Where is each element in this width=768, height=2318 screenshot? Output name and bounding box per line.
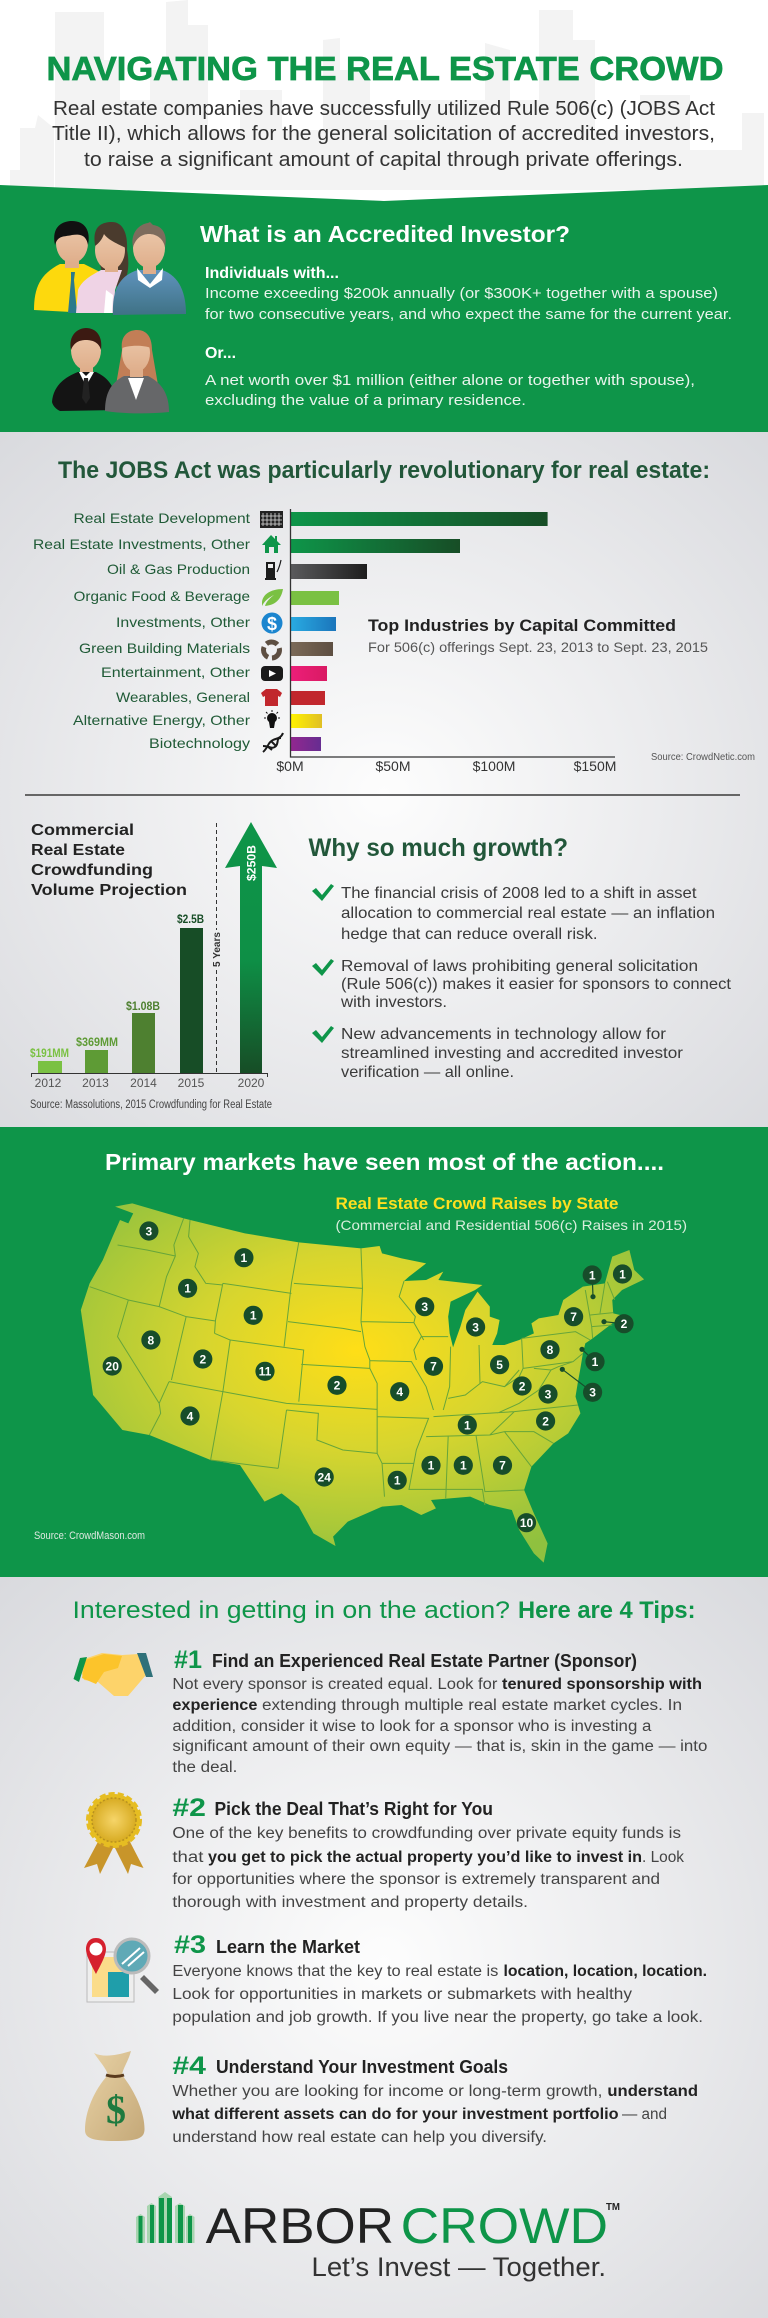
text block: or xyxy=(205,345,695,409)
tip 2: you get to pick the actual property you’d like to invest in xyxy=(208,1849,642,1866)
map: united states xyxy=(81,1203,644,1563)
source: Source: Massolutions, 2015 Crowdfunding for Real Estate xyxy=(30,1099,272,1111)
heading: projection chart: Real Estate xyxy=(31,842,125,859)
icon: leaf xyxy=(262,589,283,606)
icon: logo buildings xyxy=(136,2192,194,2243)
heading: The JOBS Act was particularly revolutionary for real estate: xyxy=(58,457,710,484)
logo: TM xyxy=(606,2202,620,2213)
map title: (Commercial and Residential 506(c) Raises in 2015) xyxy=(336,1217,687,1233)
bar chart: top industries: Investments, Other xyxy=(116,614,250,630)
state count badges: 1 xyxy=(250,1309,257,1323)
bar chart: volume projection: $369MM xyxy=(76,1037,118,1049)
text block: or: Or... xyxy=(205,345,236,362)
tip 1: addition, consider it wise to look for a sponsor who is investing a xyxy=(172,1718,652,1735)
bar chart: volume projection: 2015 xyxy=(178,1076,205,1090)
intro text: Title II), which allows for the general solicitation of accredited investors, xyxy=(52,123,715,145)
heading xyxy=(72,1597,696,1624)
state count badges: 3 xyxy=(421,1300,428,1314)
icon: fuel pump xyxy=(265,560,281,580)
tip 2: One of the key benefits to crowdfunding over private equity funds is xyxy=(172,1825,681,1842)
tip 2: thorough with investment and property details. xyxy=(172,1894,528,1911)
check item 2 xyxy=(312,958,732,1011)
state count badges: 11 xyxy=(259,1365,272,1379)
panel: primary markets map xyxy=(0,1127,768,1577)
heading: why so much growth: Why so much growth? xyxy=(308,834,568,862)
state count badges: 1 xyxy=(460,1459,467,1473)
icon: money bag xyxy=(85,2051,145,2141)
bar chart: top industries: $100M xyxy=(473,758,515,774)
state count badges xyxy=(103,1221,634,1532)
panel: tips xyxy=(0,1577,768,2318)
bar chart: top industries: Green Building Materials xyxy=(79,640,250,656)
bar chart: volume projection: $191MM xyxy=(30,1048,69,1060)
intro text: Real estate companies have successfully utilized Rule 506(c) (JOBS Act xyxy=(53,98,715,120)
bar chart: volume projection: 2014 xyxy=(130,1076,157,1090)
text block: or: A net worth over $1 million (either alone or together with spouse), xyxy=(205,372,695,389)
icon: video play xyxy=(261,666,283,681)
icon: money bag: $ xyxy=(106,2087,126,2132)
bar chart: top industries: $50M xyxy=(375,758,411,774)
map title: Real Estate Crowd Raises by State xyxy=(336,1195,618,1213)
tip 2: #2 xyxy=(172,1794,206,1822)
state count badges: 3 xyxy=(472,1320,479,1334)
icon: three investors xyxy=(34,221,186,315)
logo: ARBOR xyxy=(206,2198,394,2254)
heading: Interested in getting in on the action? xyxy=(72,1597,510,1624)
check item 1: allocation to commercial real estate — an inflation xyxy=(341,905,715,922)
state count badges: 1 xyxy=(394,1474,401,1488)
bar chart: volume projection xyxy=(30,822,277,1090)
logo: CROWD xyxy=(401,2198,608,2254)
tip 2: . Look xyxy=(642,1849,684,1866)
chart caption: Top Industries by Capital Committed xyxy=(368,617,676,635)
check item 1: The financial crisis of 2008 led to a shift in asset xyxy=(341,885,697,902)
check item 2: with investors. xyxy=(340,994,447,1011)
heading: projection chart: Commercial xyxy=(31,822,134,839)
heading: What is an Accredited Investor? xyxy=(200,221,570,247)
icon: house xyxy=(262,535,281,553)
tip 4: Whether you are looking for income or long-term growth, xyxy=(172,2083,602,2100)
tip 2: Pick the Deal That’s Right for You xyxy=(214,1799,493,1819)
tip 4: — and xyxy=(622,2106,667,2123)
bar chart: top industries: Real Estate Investments, Other xyxy=(33,536,250,552)
logo xyxy=(136,2192,620,2282)
bar chart: volume projection: $250B xyxy=(244,845,258,881)
state count badges: 1 xyxy=(619,1267,626,1281)
tip 4: what different assets can do for your investment portfolio xyxy=(171,2106,619,2123)
intro text: to raise a significant amount of capital through private offerings. xyxy=(84,149,683,171)
bar chart: volume projection: 2020 xyxy=(238,1076,265,1090)
tip 1: #1 xyxy=(174,1646,202,1674)
tip 2: that xyxy=(172,1849,204,1866)
text block: individuals: Income exceeding $200k annually (or $300K+ together with a spouse) xyxy=(205,285,718,302)
state count badges: 3 xyxy=(589,1386,596,1400)
bar chart: top industries: Biotechnology xyxy=(149,735,250,751)
state count badges: 5 xyxy=(496,1358,503,1372)
state count badges: 2 xyxy=(334,1379,341,1393)
state count badges: 24 xyxy=(318,1470,331,1484)
icon: dollar coin: $ xyxy=(267,614,277,634)
chart caption: For 506(c) offerings Sept. 23, 2013 to Sept. 23, 2015 xyxy=(368,639,708,655)
tip 3: #3 xyxy=(174,1931,206,1959)
tip 4: Understand Your Investment Goals xyxy=(216,2057,508,2077)
title: NAVIGATING THE REAL ESTATE CROWD xyxy=(46,50,724,87)
bar chart: volume projection: $1.08B xyxy=(126,1001,160,1013)
bar chart: volume projection: 2012 xyxy=(35,1076,62,1090)
bar chart: top industries: Real Estate Development xyxy=(74,510,250,526)
bar chart: top industries: Wearables, General xyxy=(116,689,250,705)
tip 3: Look for opportunities in markets or submarkets with healthy xyxy=(172,1986,632,2003)
check item 2: Removal of laws prohibiting general solicitation xyxy=(341,958,698,975)
tip 3: population and job growth. If you live near the property, go take a look. xyxy=(172,2009,703,2026)
bar chart: top industries xyxy=(33,509,616,774)
state count badges: 1 xyxy=(184,1282,191,1296)
check list xyxy=(312,884,732,1081)
map title xyxy=(336,1195,687,1233)
tip 1: tenured sponsorship with xyxy=(502,1676,702,1693)
tip 1: Not every sponsor is created equal. Look for xyxy=(172,1676,497,1693)
icon: map and magnifier xyxy=(86,1938,159,2002)
tip 4: understand how real estate can help you diversify. xyxy=(172,2129,547,2146)
map connectors xyxy=(560,1275,624,1392)
check item 3 xyxy=(312,1026,684,1081)
intro text xyxy=(52,98,715,171)
state count badges: 20 xyxy=(106,1359,119,1373)
chart caption xyxy=(368,617,708,655)
tip 2: for opportunities where the sponsor is extremely transparent and xyxy=(172,1871,660,1888)
state count badges: 8 xyxy=(148,1333,155,1347)
state count badges: 1 xyxy=(464,1418,471,1432)
tip 4 xyxy=(85,2051,698,2146)
icon: dollar coin xyxy=(262,612,282,634)
tip 1: significant amount of their own equity — that is, skin in the game — into xyxy=(172,1738,707,1755)
tip 3: Everyone knows that the key to real estate is xyxy=(172,1963,499,1980)
state count badges: 2 xyxy=(542,1414,549,1428)
icon: building xyxy=(260,511,283,528)
state count badges: 1 xyxy=(428,1459,435,1473)
state count badges: 7 xyxy=(430,1360,437,1374)
source: Source: CrowdNetic.com xyxy=(651,752,755,763)
heading: projection chart: Volume Projection xyxy=(31,882,187,899)
state count badges: 1 xyxy=(589,1268,596,1282)
state count badges: 7 xyxy=(570,1310,577,1324)
text block: individuals: for two consecutive years, and who expect the same for the current year. xyxy=(205,306,732,323)
state count badges: 2 xyxy=(519,1379,526,1393)
icon: handshake xyxy=(74,1653,153,1696)
icon: two investors xyxy=(52,328,169,413)
heading: projection chart xyxy=(31,822,187,899)
tip 1 xyxy=(74,1646,707,1776)
icon: dna xyxy=(263,733,283,752)
heading: Primary markets have seen most of the action.... xyxy=(105,1149,664,1175)
state count badges: 10 xyxy=(520,1516,533,1530)
state count badges: 2 xyxy=(621,1317,628,1331)
bar chart: top industries: Alternative Energy, Other xyxy=(73,712,250,728)
state count badges: 2 xyxy=(199,1352,206,1366)
check item 3: verification — all online. xyxy=(341,1064,514,1081)
bar chart: top industries: Oil & Gas Production xyxy=(107,561,250,577)
state count badges: 8 xyxy=(547,1343,554,1357)
check item 3: streamlined investing and accredited investor xyxy=(341,1045,684,1062)
tip 4: understand xyxy=(607,2083,698,2100)
bar chart: top industries: Organic Food & Beverage xyxy=(74,588,250,604)
panel: accredited investor xyxy=(0,185,768,432)
tip 1: experience xyxy=(172,1697,258,1714)
heading: projection chart: Crowdfunding xyxy=(31,862,153,879)
bar chart: top industries: $0M xyxy=(276,758,304,774)
state count badges: 1 xyxy=(592,1355,599,1369)
tip 2 xyxy=(84,1794,684,1911)
bar chart: volume projection: $2.5B xyxy=(177,914,204,926)
check item 1: hedge that can reduce overall risk. xyxy=(341,926,598,943)
skyline backdrop xyxy=(10,0,764,190)
bar chart: volume projection: 2013 xyxy=(82,1076,109,1090)
text block: individuals xyxy=(205,265,732,323)
state count badges: 7 xyxy=(499,1459,506,1473)
map outline and state borders xyxy=(81,1203,644,1563)
logo: Let’s Invest — Together. xyxy=(312,2252,606,2282)
tip 4: #4 xyxy=(172,2052,206,2080)
state count badges: 4 xyxy=(396,1385,403,1399)
bar chart: top industries: Entertainment, Other xyxy=(101,664,250,680)
tip 3: Learn the Market xyxy=(216,1937,360,1957)
icon: medal xyxy=(84,1794,144,1874)
tip 1: the deal. xyxy=(172,1759,237,1776)
state count badges: 4 xyxy=(187,1409,194,1423)
tip 3 xyxy=(86,1931,707,2026)
check item 2: (Rule 506(c)) makes it easier for sponsors to connect xyxy=(341,976,732,993)
icon: recycle xyxy=(264,642,280,658)
check item 3: New advancements in technology allow for xyxy=(341,1026,667,1043)
text block: or: excluding the value of a primary residence. xyxy=(205,392,526,409)
state count badges: 3 xyxy=(146,1224,153,1238)
tip 3: location, location, location. xyxy=(504,1963,707,1980)
check item 1 xyxy=(312,884,715,943)
tip 1: Find an Experienced Real Estate Partner (Sponsor) xyxy=(212,1651,637,1671)
state count badges: 1 xyxy=(241,1251,248,1265)
bar chart: top industries: $150M xyxy=(574,758,616,774)
panel: jobs act and growth xyxy=(0,432,768,1127)
tip 1: extending through multiple real estate market cycles. In xyxy=(262,1697,682,1714)
arrow: 2020 projection xyxy=(225,822,277,1073)
bar chart: volume projection: 5 Years xyxy=(212,932,223,967)
heading: Here are 4 Tips: xyxy=(518,1597,696,1624)
text block: individuals: Individuals with... xyxy=(205,265,339,282)
icon: t-shirt xyxy=(261,689,282,706)
icon: light bulb xyxy=(264,710,280,728)
state count badges: 3 xyxy=(545,1387,552,1401)
source: Source: CrowdMason.com xyxy=(34,1530,145,1542)
